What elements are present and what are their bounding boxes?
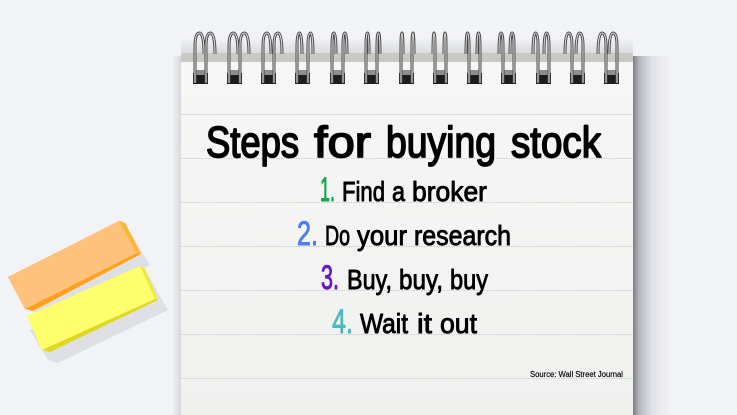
step 4: Wait [360, 308, 408, 339]
title: stock [511, 118, 602, 167]
step 4: 4. [332, 303, 353, 341]
step 3: buy [450, 264, 488, 295]
orange note [8, 221, 141, 311]
step 1: 1. [320, 171, 335, 209]
step 4: it [417, 308, 432, 339]
step 3: Buy, [347, 264, 392, 295]
step 1: Find [342, 176, 385, 207]
ruled lines [181, 114, 633, 378]
notebook page [181, 53, 633, 415]
step 1: broker [412, 176, 487, 207]
step 4 [332, 303, 477, 341]
step 1: a [392, 176, 405, 207]
step 1 [320, 171, 487, 209]
binding strip [181, 53, 633, 62]
step 3: buy, [399, 264, 443, 295]
step 4: out [440, 308, 477, 339]
title: for [314, 118, 371, 167]
step 2: research [414, 220, 511, 251]
step 2: Do [325, 220, 350, 251]
title: buying [386, 118, 496, 167]
source note: Source: Wall Street Journal [530, 370, 623, 379]
step 2: 2. [297, 215, 318, 253]
yellow note [27, 266, 158, 352]
step 2: your [357, 220, 407, 251]
notebook shadow [172, 38, 671, 415]
step 2 [297, 215, 511, 253]
title: Steps [206, 118, 299, 167]
title [206, 118, 602, 167]
sticky notes [8, 221, 168, 363]
step 3 [321, 259, 488, 297]
shadows [30, 232, 150, 320]
step 3: 3. [321, 259, 339, 297]
spiral rings [193, 33, 619, 84]
